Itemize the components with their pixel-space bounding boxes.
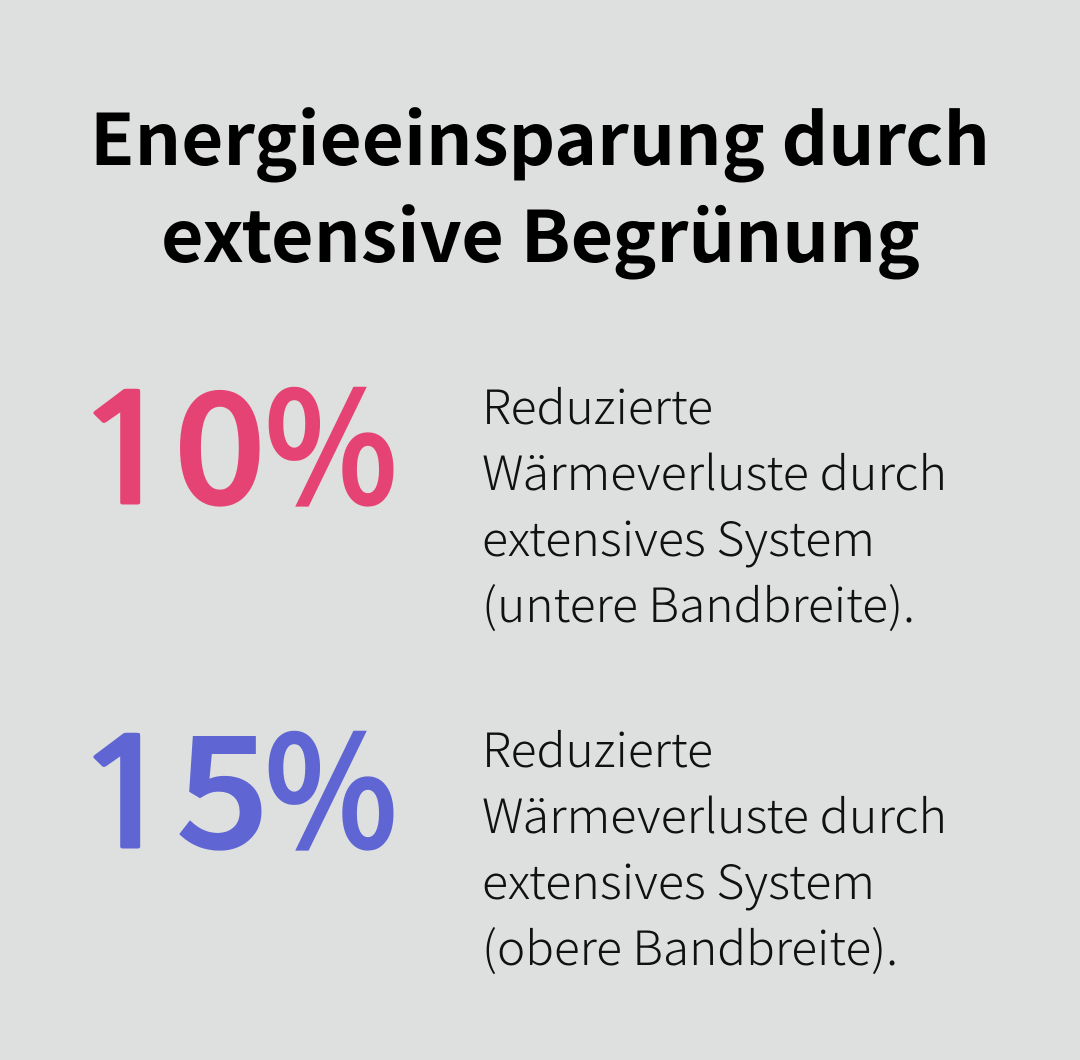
text block: upper range description: Reduzierte: [482, 712, 713, 781]
text block: lower range description: (untere Bandbreite).: [482, 567, 915, 636]
panel: statistic 15%: [69, 670, 947, 979]
title: [90, 84, 990, 283]
text block: lower range description: Wärmeverluste durch: [482, 435, 947, 504]
panel: statistic 10%: [69, 326, 947, 636]
number: 10%: %: [265, 326, 397, 548]
text block: upper range description: Wärmeverluste durch: [482, 778, 947, 847]
text block: upper range description: (obere Bandbreite).: [482, 910, 898, 979]
text block: lower range description: [482, 369, 947, 636]
title: extensive Begrünung: [161, 181, 920, 283]
text block: upper range description: [482, 712, 947, 979]
title: Energieeinsparung durch: [90, 84, 990, 186]
number: 15%: [69, 670, 397, 892]
text block: lower range description: Reduzierte: [482, 369, 713, 438]
number: 15%: 1: [69, 721, 183, 871]
number: 15%: %: [265, 670, 397, 892]
number: 10%: [69, 326, 397, 548]
number: 10%: 0: [174, 326, 266, 548]
text block: lower range description: extensives System: [482, 501, 875, 570]
text block: upper range description: extensives System: [482, 844, 875, 913]
number: 10%: 1: [69, 377, 183, 527]
number: 15%: 5: [177, 670, 269, 892]
